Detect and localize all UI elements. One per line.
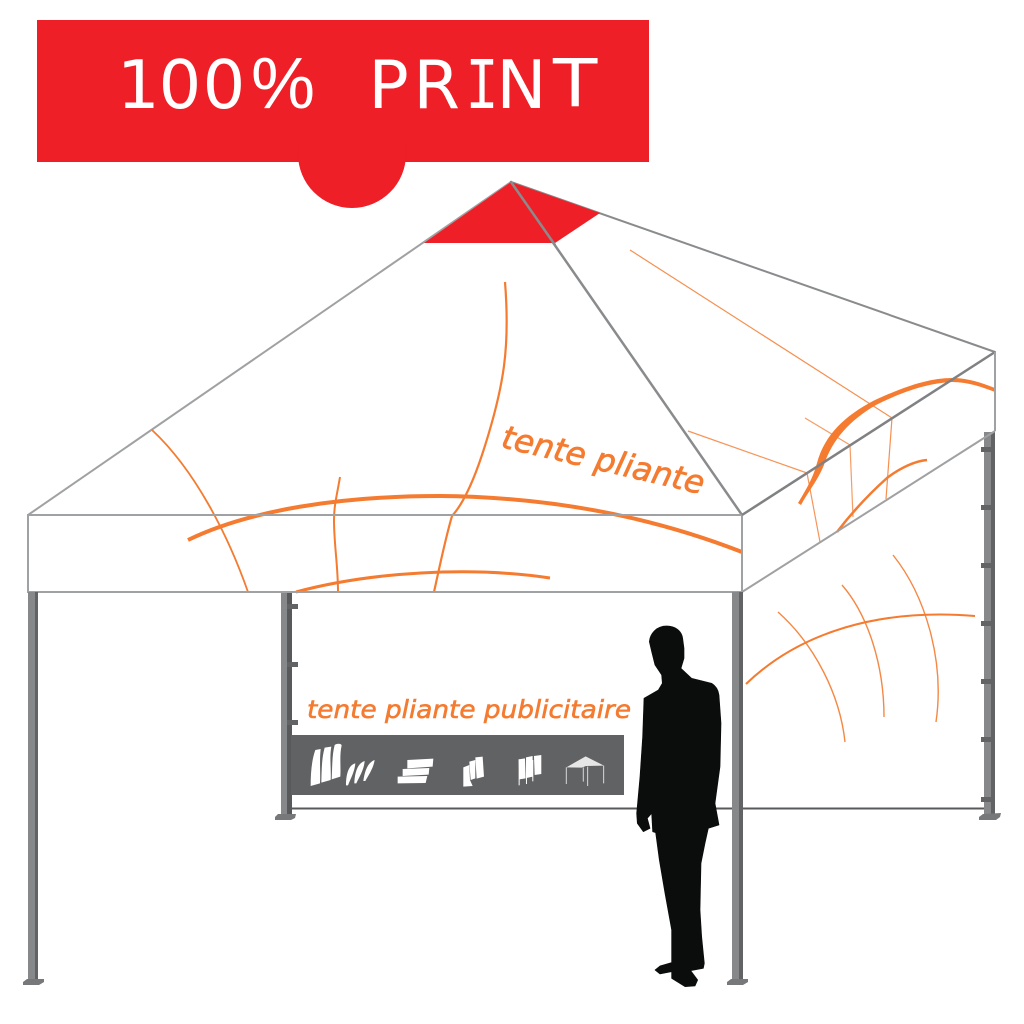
icon: teardrop flags bbox=[346, 760, 375, 785]
front right pole bbox=[727, 592, 748, 985]
tent roof outline bbox=[28, 182, 995, 515]
banner title: I bbox=[465, 47, 499, 131]
banner title bbox=[117, 44, 598, 131]
person silhouette bbox=[637, 626, 721, 987]
back left pole bbox=[275, 592, 298, 820]
back right pole bbox=[979, 432, 1001, 820]
banner title: N bbox=[496, 46, 547, 124]
side valance bbox=[742, 352, 995, 592]
roof label: tente pliante: tente pliante bbox=[498, 418, 708, 502]
icon: roll banners bbox=[463, 757, 484, 787]
roof ridge over red peak bbox=[511, 182, 555, 245]
icon: feather flags bbox=[311, 744, 342, 786]
orange roof swirls, front bbox=[152, 282, 742, 592]
front valance bbox=[28, 515, 742, 592]
banner title: PR bbox=[368, 46, 460, 124]
sign label: tente pliante publicitaire: tente pliante publicitaire bbox=[307, 695, 631, 724]
red banner bbox=[37, 20, 649, 208]
icon: block flags bbox=[519, 755, 541, 779]
grey product banner bbox=[291, 735, 624, 795]
banner title: 100 bbox=[117, 46, 245, 124]
front left pole bbox=[23, 592, 44, 985]
orange roof swirls, side bbox=[630, 250, 995, 542]
back crossbar bbox=[292, 808, 984, 810]
red roof peak bbox=[424, 182, 600, 243]
orange wall swirls bbox=[746, 555, 975, 742]
icon: mini tent bbox=[566, 756, 604, 786]
icon: stacked banners bbox=[398, 759, 433, 783]
banner title: T bbox=[552, 46, 598, 122]
banner title: % bbox=[251, 44, 315, 124]
